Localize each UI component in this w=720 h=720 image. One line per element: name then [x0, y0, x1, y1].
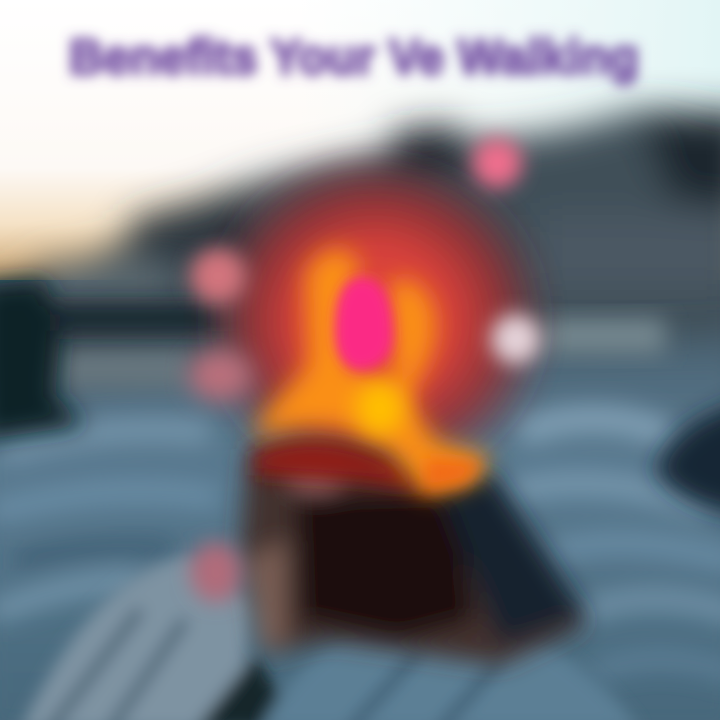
- title: Benefits Your Ve Walking: [69, 29, 639, 85]
- illustration: yellow highlight: [356, 380, 404, 436]
- background: dark shape on the right: [655, 400, 720, 515]
- illustration: magenta oval: [335, 277, 393, 370]
- icon: pink dot left: [190, 248, 246, 304]
- background: dark shoreline: [0, 110, 720, 420]
- foreground: striped sleeve: [20, 555, 640, 720]
- background: wave texture: [0, 419, 720, 672]
- background: dark rock on the left: [0, 280, 220, 440]
- illustration: dark red band above the hand: [255, 440, 430, 492]
- illustration: orange and yellow figure: [255, 249, 490, 495]
- illustration: hand holding phone: [240, 442, 585, 665]
- illustration: orange base: [425, 458, 482, 490]
- icon: pink dot bottom left: [190, 542, 242, 602]
- icon: white dot right: [491, 314, 541, 364]
- icon: pink dot top right: [472, 138, 522, 188]
- background: sky: [0, 0, 720, 280]
- illustration: red radial glow: [197, 148, 553, 492]
- background: blue water and sand: [0, 318, 720, 720]
- icon: pink dot lower left: [188, 349, 252, 401]
